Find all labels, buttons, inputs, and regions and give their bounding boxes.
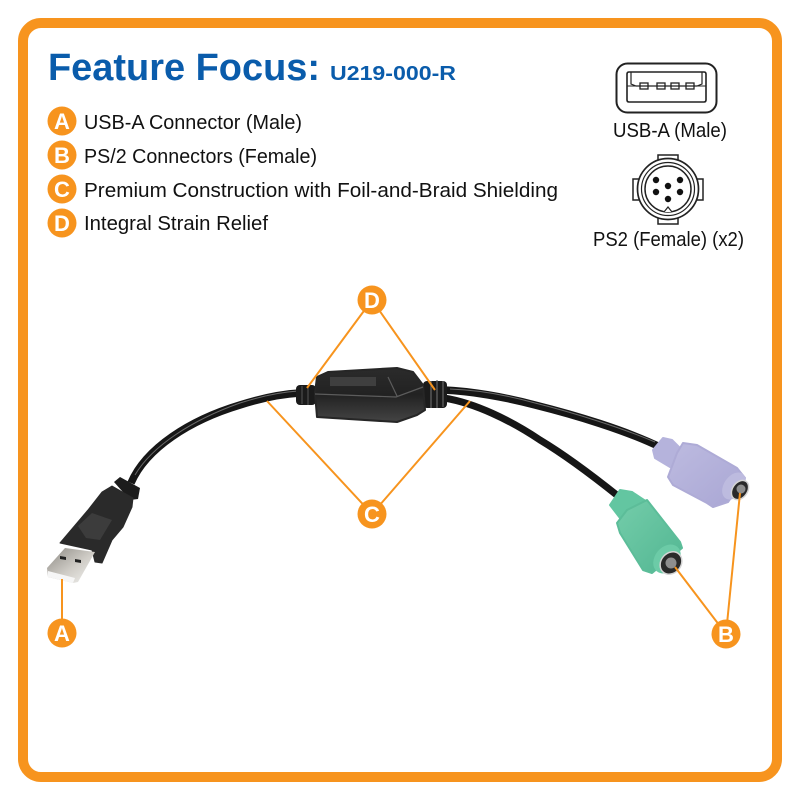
module logo xyxy=(330,377,376,386)
icon: PS2 port xyxy=(633,155,703,224)
callout B xyxy=(675,493,740,648)
callout B: B xyxy=(718,622,734,647)
icon: USB-A port xyxy=(616,64,716,112)
USB symbol xyxy=(78,513,112,540)
legend item B xyxy=(48,140,317,170)
callout C: C xyxy=(364,502,380,527)
legend item A xyxy=(48,106,302,136)
callout A: A xyxy=(54,621,70,646)
cable: module to purple connector xyxy=(444,389,660,447)
legend item B: PS/2 Connectors (Female) xyxy=(84,146,317,168)
legend item A: A xyxy=(54,109,70,134)
callout D xyxy=(307,286,435,390)
legend item C: C xyxy=(54,177,70,202)
title: U219-000-R xyxy=(330,63,457,85)
callout A xyxy=(48,579,76,648)
label: PS2 (Female) (x2): PS2 (Female) (x2) xyxy=(593,229,744,251)
legend item B: B xyxy=(54,143,70,168)
cable: USB to module xyxy=(131,391,300,483)
USB plug overmold xyxy=(60,486,133,563)
USB metal shell xyxy=(47,548,95,583)
legend item C: Premium Construction with Foil-and-Braid Shielding xyxy=(84,180,558,202)
module body xyxy=(315,368,425,422)
callout C xyxy=(267,401,470,528)
legend item D: D xyxy=(54,211,70,236)
feature legend xyxy=(48,106,558,238)
USB strain relief xyxy=(114,477,140,500)
legend item D xyxy=(48,208,268,238)
purple connector xyxy=(653,438,752,507)
product photo: USB to PS/2 cable xyxy=(47,368,752,583)
title: Feature Focus: xyxy=(48,47,320,89)
callout D: D xyxy=(364,288,380,313)
label: USB-A (Male): USB-A (Male) xyxy=(613,120,727,142)
module left strain relief xyxy=(296,385,316,405)
cable: module to green connector xyxy=(444,398,618,496)
green connector xyxy=(610,490,686,579)
legend item D: Integral Strain Relief xyxy=(84,213,268,235)
legend item C xyxy=(48,174,558,204)
legend item A: USB-A Connector (Male) xyxy=(84,112,302,134)
module right strain relief xyxy=(423,380,447,408)
title xyxy=(48,47,457,89)
